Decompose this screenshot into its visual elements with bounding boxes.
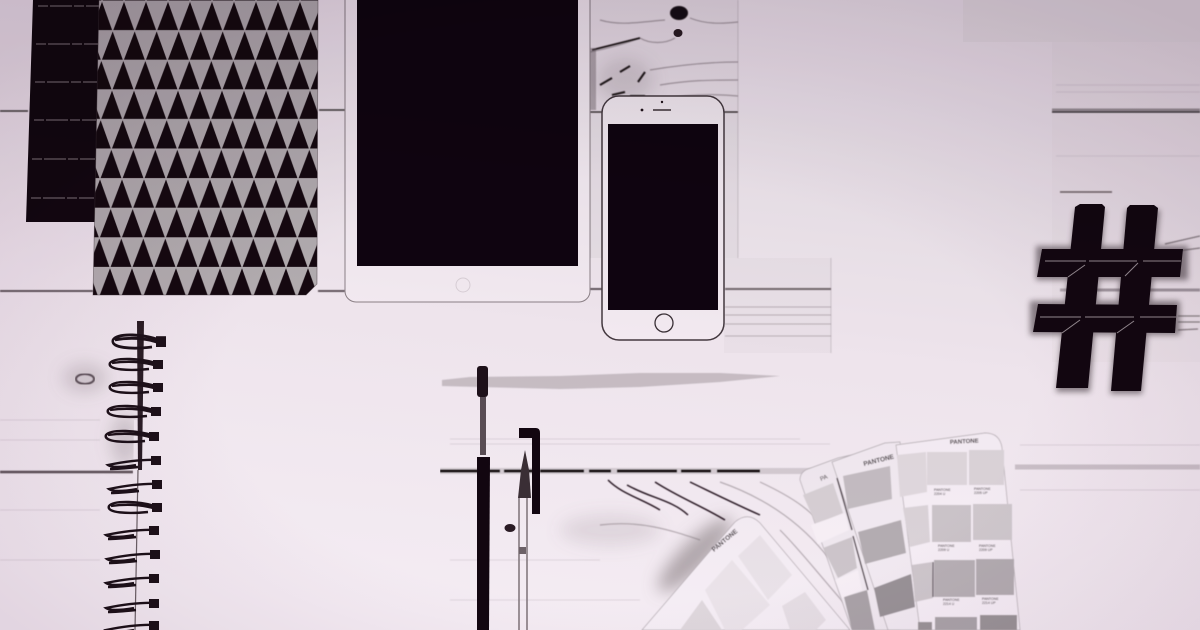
spiral notebook xyxy=(106,316,442,630)
tablet xyxy=(345,0,590,302)
card 3 swatch codes: 2205 UP xyxy=(974,491,988,495)
card 3 swatch codes: 2209 U xyxy=(938,548,950,552)
phone screen xyxy=(608,124,718,310)
card 3 swatch codes: PANTONE xyxy=(979,544,996,548)
paint brush xyxy=(477,366,490,630)
pantone colour cards xyxy=(800,433,1020,630)
wood streak xyxy=(442,373,780,389)
phone speaker xyxy=(653,109,671,111)
card 2 label: PANTONE xyxy=(863,453,895,468)
card 3 swatch codes: PANTONE xyxy=(974,487,991,491)
card 3 swatch codes: 2214 U xyxy=(943,602,955,606)
pantone fan card bottom xyxy=(642,517,850,630)
phone home button xyxy=(655,314,673,332)
dark striped notebook xyxy=(26,0,102,222)
notebook page xyxy=(131,319,442,630)
card 3 swatch codes: 2209 UP xyxy=(979,548,993,552)
card 3 swatch codes: PANTONE xyxy=(938,544,955,548)
card 3 swatch codes xyxy=(934,487,999,606)
card 3 swatch codes: 2204 U xyxy=(934,492,946,496)
card 3 swatch codes: PANTONE xyxy=(943,598,960,602)
fan card label: PANTONE xyxy=(711,528,740,554)
pantone colour card 1 xyxy=(800,445,900,630)
notebook back edge xyxy=(165,315,432,317)
hash symbol object xyxy=(1030,204,1188,394)
triangle pattern notebook xyxy=(93,0,318,295)
card 3 heading: PANTONE xyxy=(950,438,979,446)
wood knots xyxy=(76,6,688,532)
pantone colour card 2 xyxy=(832,442,925,630)
spiral coils xyxy=(106,335,166,630)
card 3 swatch codes: PANTONE xyxy=(934,488,951,492)
tablet home button xyxy=(456,278,470,292)
smartphone xyxy=(602,96,724,340)
card 3 swatch codes: PANTONE xyxy=(982,597,999,601)
card 1 label: PA xyxy=(820,474,829,483)
card 3 swatch codes: 2214 UP xyxy=(982,601,996,605)
pantone colour card 3 xyxy=(896,433,1020,630)
notebook spine xyxy=(137,321,144,470)
tablet screen xyxy=(357,0,578,266)
pen xyxy=(518,428,540,630)
